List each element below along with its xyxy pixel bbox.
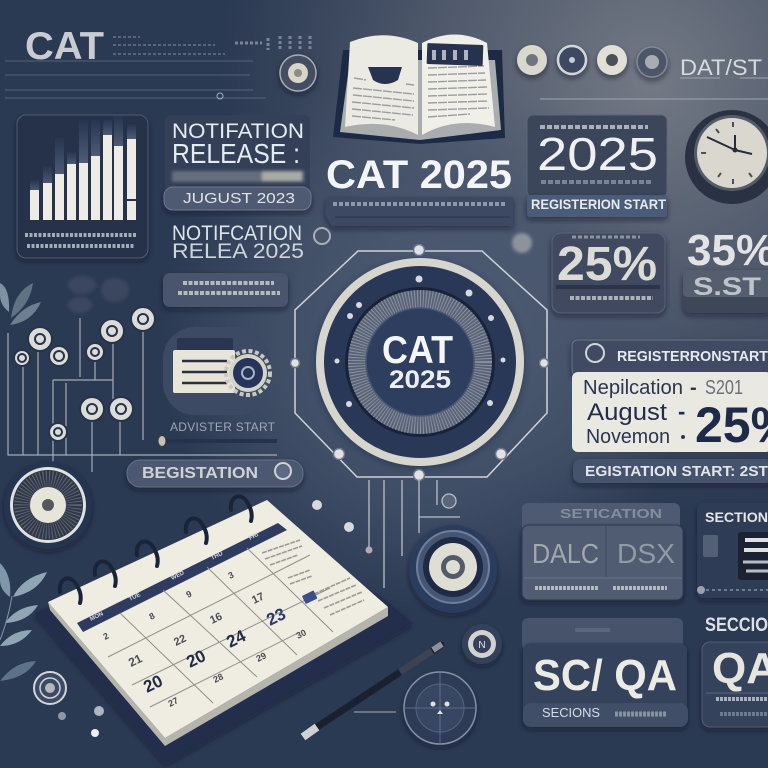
icon: grey sphere	[512, 233, 532, 253]
calendar: FRI	[248, 532, 260, 542]
central dial: CAT 2025	[290, 244, 548, 480]
panel: section QA	[702, 615, 768, 727]
central dial: CAT 2025: CAT	[382, 329, 453, 372]
panel: 35 percent S ST: S.ST	[693, 273, 761, 301]
calendar: 22	[172, 633, 188, 649]
panel: 2025 registration start: REGISTERION START	[531, 196, 666, 212]
panel: SC/QA sections	[522, 618, 688, 727]
label pill: registration: BEGISTATION	[142, 465, 258, 482]
central dial: CAT 2025: 2025	[389, 366, 451, 394]
calendar: 20	[183, 646, 209, 672]
caption: administer start: ADVISTER START	[170, 420, 276, 434]
panel: DALC DSX: SETICATION	[560, 506, 662, 521]
icon: open book	[333, 34, 505, 144]
panel: section right: SECTION	[705, 509, 768, 525]
label pill: registration	[127, 460, 303, 487]
calendar: 20	[140, 671, 166, 697]
calendar: 2	[101, 631, 110, 642]
calendar: WED	[170, 570, 186, 582]
title: CAT top-left: CAT	[25, 25, 104, 68]
panel: notification release 2025: RELEA 2025	[172, 240, 304, 263]
calendar: 27	[166, 695, 180, 709]
panel: DALC DSX	[522, 503, 683, 600]
panel: registration start timeline card: -	[678, 399, 685, 424]
label: DAT/ST: DAT/ST	[680, 55, 762, 80]
panel: SC/QA sections: SECIONS	[542, 705, 600, 720]
panel: registration start timeline card	[572, 340, 768, 483]
icon: cat badge	[409, 525, 497, 613]
panel: registration start timeline card: S201	[705, 377, 743, 399]
caption: administer start	[158, 420, 277, 446]
icon: large knob left	[4, 461, 92, 549]
calendar: 3	[226, 570, 235, 581]
icons: row of top buttons	[517, 45, 667, 77]
heading: CAT 2025: CAT 2025	[326, 153, 512, 197]
panel: notification release August 2023: JUGUST 2023	[183, 190, 295, 207]
panel: notification release August 2023	[164, 115, 311, 210]
panel: notification release August 2023: NOTIFATION	[172, 120, 304, 143]
timeline nodes diagram	[8, 307, 277, 472]
calendar: 29	[254, 650, 268, 664]
icon: small knob top	[280, 55, 316, 91]
panel: DALC DSX: DSX	[617, 538, 675, 569]
connector lines under dial	[312, 480, 460, 588]
calendar: 23	[263, 604, 289, 630]
panel: notification release 2025: NOTIFCATION	[172, 222, 302, 245]
icon: blurred flowers	[68, 276, 129, 313]
panel: 25 percent: 25%	[557, 238, 657, 291]
calendar: 8	[147, 611, 156, 622]
panel: SC/QA sections: SC/ QA	[533, 651, 677, 700]
icon: document with gear	[163, 327, 270, 415]
icon: small knob bottom-left	[34, 672, 104, 737]
panel: registration start timeline card: Novemon	[586, 426, 670, 448]
panel: 35 percent S ST	[683, 226, 768, 313]
calendar	[35, 496, 412, 763]
icon: leaves bottom-left	[0, 563, 47, 681]
panel: 25 percent	[552, 233, 665, 313]
title: CAT top-left	[5, 25, 310, 99]
panel: 2025 registration start	[527, 115, 667, 217]
icon: clock	[685, 110, 768, 204]
panel: registration start timeline card: Nepilcation	[583, 377, 683, 399]
calendar: THU	[210, 551, 224, 562]
calendar: 24	[223, 626, 249, 652]
calendar: 16	[208, 611, 224, 627]
icon: bottom robot badge	[354, 672, 476, 744]
panel: registration start timeline card: -	[690, 377, 697, 399]
calendar: TUE	[128, 592, 142, 603]
panel: DALC DSX: DALC	[532, 538, 599, 569]
panel: section right	[697, 503, 768, 598]
subtitle bar	[325, 197, 513, 226]
icon: small round N: N	[478, 640, 486, 651]
calendar: 28	[211, 671, 225, 685]
panel: registration start timeline card: August	[587, 399, 667, 426]
calendar: 9	[184, 589, 193, 600]
bar chart panel	[17, 115, 148, 258]
calendar: 17	[250, 591, 266, 607]
panel: 2025 registration start: 2025	[537, 128, 658, 180]
icon: pen	[303, 644, 442, 737]
panel: notification release 2025	[163, 222, 304, 307]
panel: notification release August 2023: RELEASE :	[172, 138, 300, 169]
calendar: 21	[126, 651, 145, 670]
icon: leaf top-left	[0, 283, 41, 325]
label: DAT/ST	[540, 55, 768, 99]
calendar: 30	[294, 627, 308, 641]
panel: registration start timeline card: EGISTATION START: 2ST	[585, 463, 768, 480]
icon: small round N	[462, 624, 502, 664]
calendar: MON	[89, 611, 104, 623]
icon: side knob by notification panel	[314, 228, 330, 244]
